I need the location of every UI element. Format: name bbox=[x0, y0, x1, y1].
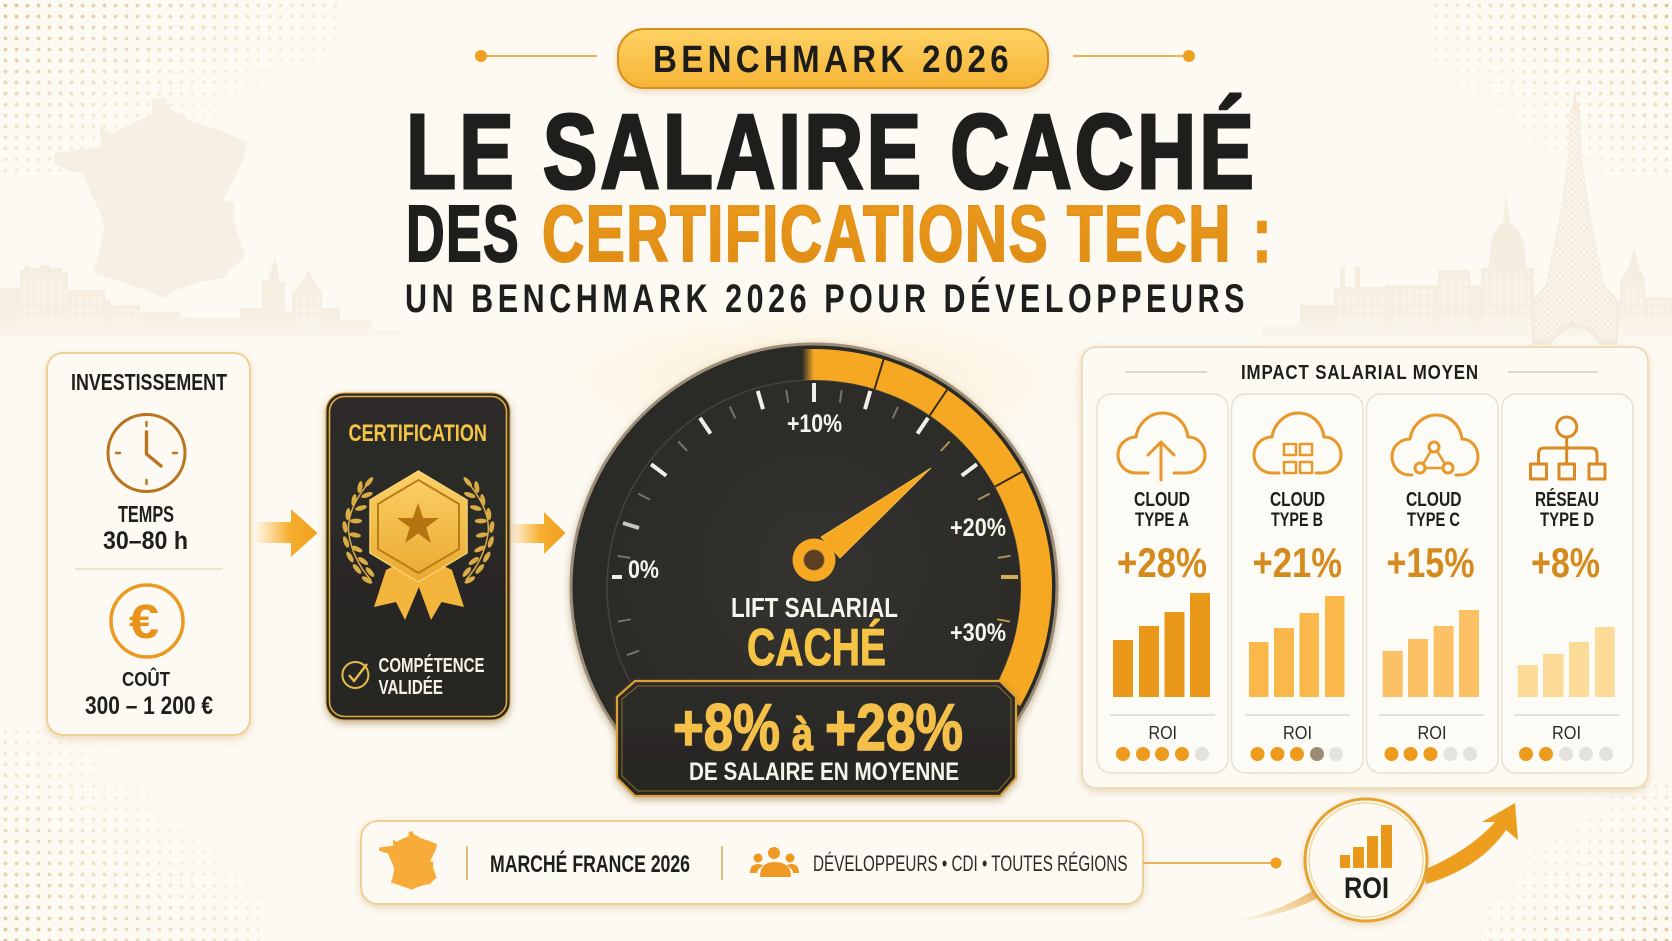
label bbox=[1535, 488, 1599, 531]
label bbox=[1134, 489, 1190, 531]
label: TYPE C bbox=[1407, 510, 1460, 531]
scale labels: +30% bbox=[950, 619, 1006, 647]
validation text: COMPÉTENCE bbox=[378, 654, 484, 677]
card: cloud type C bbox=[1366, 394, 1498, 773]
header badge bbox=[618, 29, 1048, 88]
panel: impact salarial moyen bbox=[1082, 347, 1648, 788]
label bbox=[1406, 489, 1462, 531]
arrow: investment to certification bbox=[255, 509, 318, 557]
callout value: à bbox=[792, 708, 813, 760]
left header connector bbox=[475, 50, 597, 62]
callout plaque bbox=[617, 681, 1016, 796]
icon: cloud network bbox=[1392, 415, 1478, 475]
panel heading: IMPACT SALARIAL MOYEN bbox=[1241, 362, 1479, 384]
growth arrow bbox=[1424, 803, 1518, 884]
icon: euro: € bbox=[129, 596, 159, 649]
bar chart bbox=[1383, 610, 1479, 697]
value: +21% bbox=[1252, 539, 1342, 586]
icon: cloud upload bbox=[1118, 413, 1205, 480]
gauge sun glow bbox=[514, 300, 1114, 460]
needle bbox=[792, 468, 931, 582]
card: reseau type D bbox=[1502, 394, 1633, 773]
gold arc bbox=[802, 349, 1037, 698]
card: cloud type B bbox=[1232, 394, 1363, 773]
ROI rating bbox=[1384, 723, 1477, 761]
label: CLOUD bbox=[1270, 489, 1325, 511]
scale labels: +10% bbox=[787, 410, 842, 438]
gauge bbox=[571, 344, 1057, 830]
value: +28% bbox=[1117, 539, 1207, 586]
header badge: BENCHMARK 2026 bbox=[653, 39, 1013, 81]
callout text: DE SALAIRE EN MOYENNE bbox=[689, 758, 959, 786]
callout value bbox=[673, 690, 963, 764]
major ticks bbox=[612, 383, 1018, 577]
audience text: DÉVELOPPEURS • CDI • TOUTES RÉGIONS bbox=[813, 851, 1128, 876]
arrow: certification to gauge bbox=[510, 512, 566, 554]
bar chart bbox=[1518, 627, 1615, 697]
right header connector bbox=[1073, 50, 1195, 62]
scale labels: 0% bbox=[628, 556, 659, 584]
card: cloud type A bbox=[1097, 394, 1228, 773]
title: LE SALAIRE CACHÉ bbox=[406, 93, 1257, 211]
title bbox=[405, 93, 1272, 321]
icon: ribbons bbox=[374, 560, 464, 620]
ROI rating: ROI bbox=[1552, 723, 1581, 743]
icon: people bbox=[750, 847, 799, 877]
temps label: TEMPS bbox=[118, 501, 174, 527]
background map of France bbox=[53, 97, 247, 298]
ROI rating bbox=[1250, 723, 1343, 761]
ROI rating: ROI bbox=[1283, 723, 1312, 743]
icon: cloud grid bbox=[1254, 413, 1341, 473]
title: CERTIFICATIONS TECH bbox=[542, 189, 1232, 278]
value: +15% bbox=[1386, 539, 1474, 586]
ROI rating bbox=[1116, 723, 1209, 761]
left city skyline bbox=[0, 257, 400, 345]
title: UN BENCHMARK 2026 POUR DÉVELOPPEURS bbox=[405, 276, 1249, 321]
gauge body bbox=[564, 340, 1064, 740]
scale labels: +20% bbox=[950, 514, 1006, 542]
validation text: VALIDÉE bbox=[378, 676, 443, 699]
panel: market footer bbox=[361, 821, 1143, 904]
icon: ROI bars bbox=[1340, 825, 1392, 868]
label: TYPE B bbox=[1271, 510, 1323, 531]
validation text bbox=[378, 654, 484, 699]
icon: check bbox=[342, 662, 368, 688]
label: TYPE D bbox=[1540, 510, 1594, 531]
ROI badge bbox=[1305, 799, 1427, 921]
temps value: 30–80 h bbox=[103, 527, 188, 555]
icon: clock bbox=[108, 414, 185, 492]
market label: MARCHÉ FRANCE 2026 bbox=[490, 850, 690, 878]
panel heading: INVESTISSEMENT bbox=[71, 369, 227, 395]
scale labels bbox=[628, 410, 1006, 647]
label: CLOUD bbox=[1134, 489, 1190, 511]
title: DES bbox=[406, 189, 520, 278]
title: : bbox=[1252, 190, 1272, 279]
callout value: +8% bbox=[673, 690, 780, 764]
icon: euro bbox=[111, 585, 183, 657]
panel: investissement bbox=[47, 353, 250, 735]
bar chart bbox=[1113, 593, 1210, 697]
card heading: CERTIFICATION bbox=[348, 420, 487, 447]
gauge caption accent: CACHÉ bbox=[747, 619, 886, 677]
ROI rating: ROI bbox=[1148, 723, 1177, 743]
label: CLOUD bbox=[1406, 489, 1462, 511]
callout value: +28% bbox=[825, 690, 963, 764]
label: RÉSEAU bbox=[1535, 488, 1599, 511]
gauge caption: LIFT SALARIAL bbox=[731, 592, 898, 623]
cout value: 300 – 1 200 € bbox=[85, 692, 213, 720]
cout label: COÛT bbox=[122, 667, 170, 691]
minor ticks bbox=[617, 390, 1011, 701]
icon: laurel wreath bbox=[342, 476, 495, 585]
label bbox=[1270, 489, 1325, 531]
value: +8% bbox=[1531, 539, 1600, 586]
icon: hexagon medal bbox=[370, 471, 467, 582]
bar chart bbox=[1249, 596, 1344, 697]
ROI rating: ROI bbox=[1418, 723, 1446, 743]
icon: France map bbox=[379, 831, 437, 890]
connector to ROI bbox=[1143, 858, 1282, 868]
icon: network tree bbox=[1530, 417, 1605, 479]
right city skyline with dome and Eiffel tower bbox=[1262, 83, 1672, 345]
panel: certification card bbox=[326, 393, 510, 720]
label: TYPE A bbox=[1135, 510, 1189, 531]
ROI rating bbox=[1519, 723, 1613, 761]
arrow tail bbox=[1231, 888, 1320, 922]
ROI label: ROI bbox=[1344, 872, 1389, 905]
